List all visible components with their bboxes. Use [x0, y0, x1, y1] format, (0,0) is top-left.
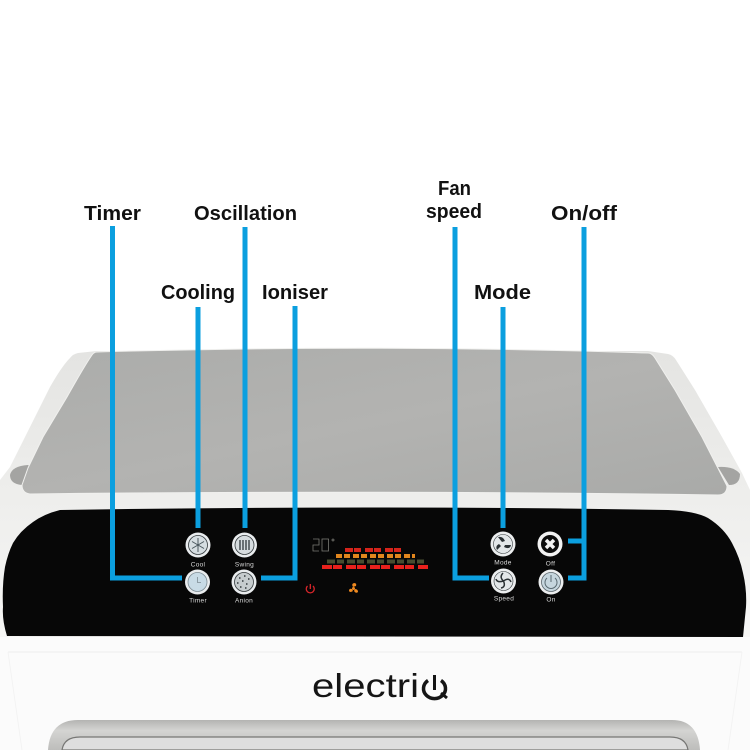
button: Mode — [490, 532, 516, 566]
grey handle — [48, 720, 700, 750]
label: Ioniser — [261, 282, 328, 578]
button: Anion: Anion — [235, 598, 253, 604]
left carry notch — [10, 465, 30, 485]
appliance body — [0, 348, 750, 750]
button: Swing — [232, 532, 257, 568]
button: On — [538, 570, 564, 604]
lower front housing — [0, 637, 750, 750]
label: Timer: Timer — [84, 203, 141, 225]
button: Off: Off — [546, 560, 555, 568]
button: Timer — [185, 570, 210, 604]
icon: orange fan indicator — [349, 583, 358, 593]
temperature display — [313, 539, 334, 551]
button: On: On — [546, 596, 556, 604]
button: Cool — [186, 532, 210, 568]
label: Ioniser: Ioniser — [262, 282, 328, 304]
label: Fan speed: Fan — [438, 178, 471, 200]
button: Anion — [232, 570, 256, 604]
label: Timer — [84, 203, 182, 578]
label: Fan speed — [426, 178, 489, 578]
label: Fan speed: speed — [426, 201, 482, 223]
LED level bars — [322, 550, 428, 567]
black control panel — [3, 508, 746, 637]
button: Speed: Speed — [494, 596, 514, 602]
grey top plate — [22, 348, 727, 495]
button: Cool: Cool — [191, 562, 206, 568]
top shell — [0, 351, 750, 640]
button: Swing: Swing — [235, 562, 254, 568]
icon: red power indicator — [306, 584, 314, 593]
button: Off — [538, 532, 562, 568]
label: Mode: Mode — [474, 282, 531, 304]
right carry notch — [718, 467, 740, 485]
label: On/off: On/off — [551, 203, 617, 225]
button: Timer: Timer — [189, 598, 207, 604]
label: Oscillation: Oscillation — [194, 203, 297, 225]
label: Cooling: Cooling — [161, 282, 235, 304]
logo: electriQ — [312, 667, 447, 704]
logo: electriQ: electri — [312, 667, 419, 704]
button: Speed — [491, 568, 516, 602]
button: Mode: Mode — [494, 560, 512, 566]
label: On/off — [551, 203, 617, 578]
